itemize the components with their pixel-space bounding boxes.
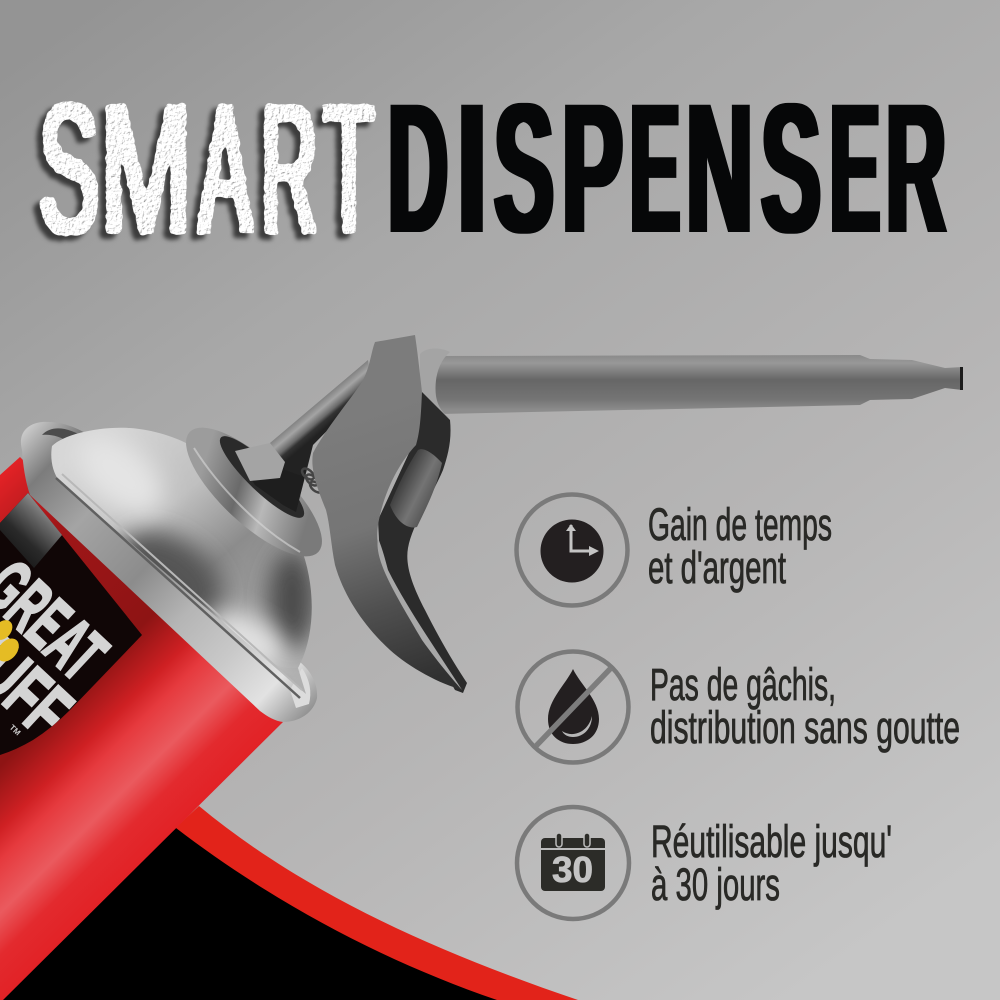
benefit: no waste	[518, 652, 960, 762]
tube collar	[420, 348, 450, 418]
title word: DISPENSER: E	[830, 66, 880, 272]
trademark: TM	[8, 723, 22, 738]
title: T	[324, 66, 374, 271]
spring	[300, 466, 324, 495]
trigger highlight	[377, 538, 462, 690]
rim back lip	[42, 428, 85, 443]
spray can	[0, 409, 340, 1000]
text: Gain de temps	[648, 499, 832, 550]
benefit: reusable	[517, 807, 892, 919]
dome	[51, 420, 316, 694]
valve collar	[168, 409, 340, 575]
icon: calendar	[517, 807, 629, 919]
text: à 30 jours	[651, 859, 780, 910]
title word: DISPENSER: D	[388, 66, 448, 272]
text: et d'argent	[648, 542, 786, 593]
title word: DISPENSER: I	[457, 66, 487, 272]
black valve base	[240, 462, 305, 512]
icon: clock	[516, 494, 628, 606]
title word: DISPENSER: E	[630, 66, 680, 272]
title word: DISPENSER: S	[494, 66, 554, 272]
title word: DISPENSER: P	[562, 66, 623, 272]
black and red swoosh	[0, 806, 578, 1000]
tube	[432, 355, 962, 414]
trigger finger rest	[390, 449, 442, 527]
icon: calendar: 30	[552, 849, 593, 890]
nozzle tip opening	[960, 367, 963, 390]
yellow foam accent	[0, 620, 19, 662]
title word: SMART: S	[39, 66, 99, 271]
icon: crossed-out drop	[518, 652, 628, 762]
metal rim	[21, 422, 317, 722]
title word: SMART: M	[100, 66, 192, 271]
rim groove lines	[56, 478, 300, 698]
connecting arm	[270, 360, 372, 477]
trigger back	[378, 390, 467, 693]
title word: DISPENSER: N	[686, 66, 753, 272]
text: Pas de gâchis,	[650, 659, 836, 710]
benefits list	[516, 494, 960, 919]
can label	[0, 493, 142, 755]
benefit: time and money	[516, 494, 832, 606]
title word: DISPENSER: S	[761, 66, 821, 272]
title	[39, 66, 946, 272]
trigger blade	[312, 335, 463, 690]
arm base	[235, 443, 285, 481]
title word: SMART: A	[199, 66, 251, 271]
title word: SMART: R	[261, 66, 317, 271]
dispenser gun	[235, 335, 963, 693]
can body	[0, 457, 283, 1000]
